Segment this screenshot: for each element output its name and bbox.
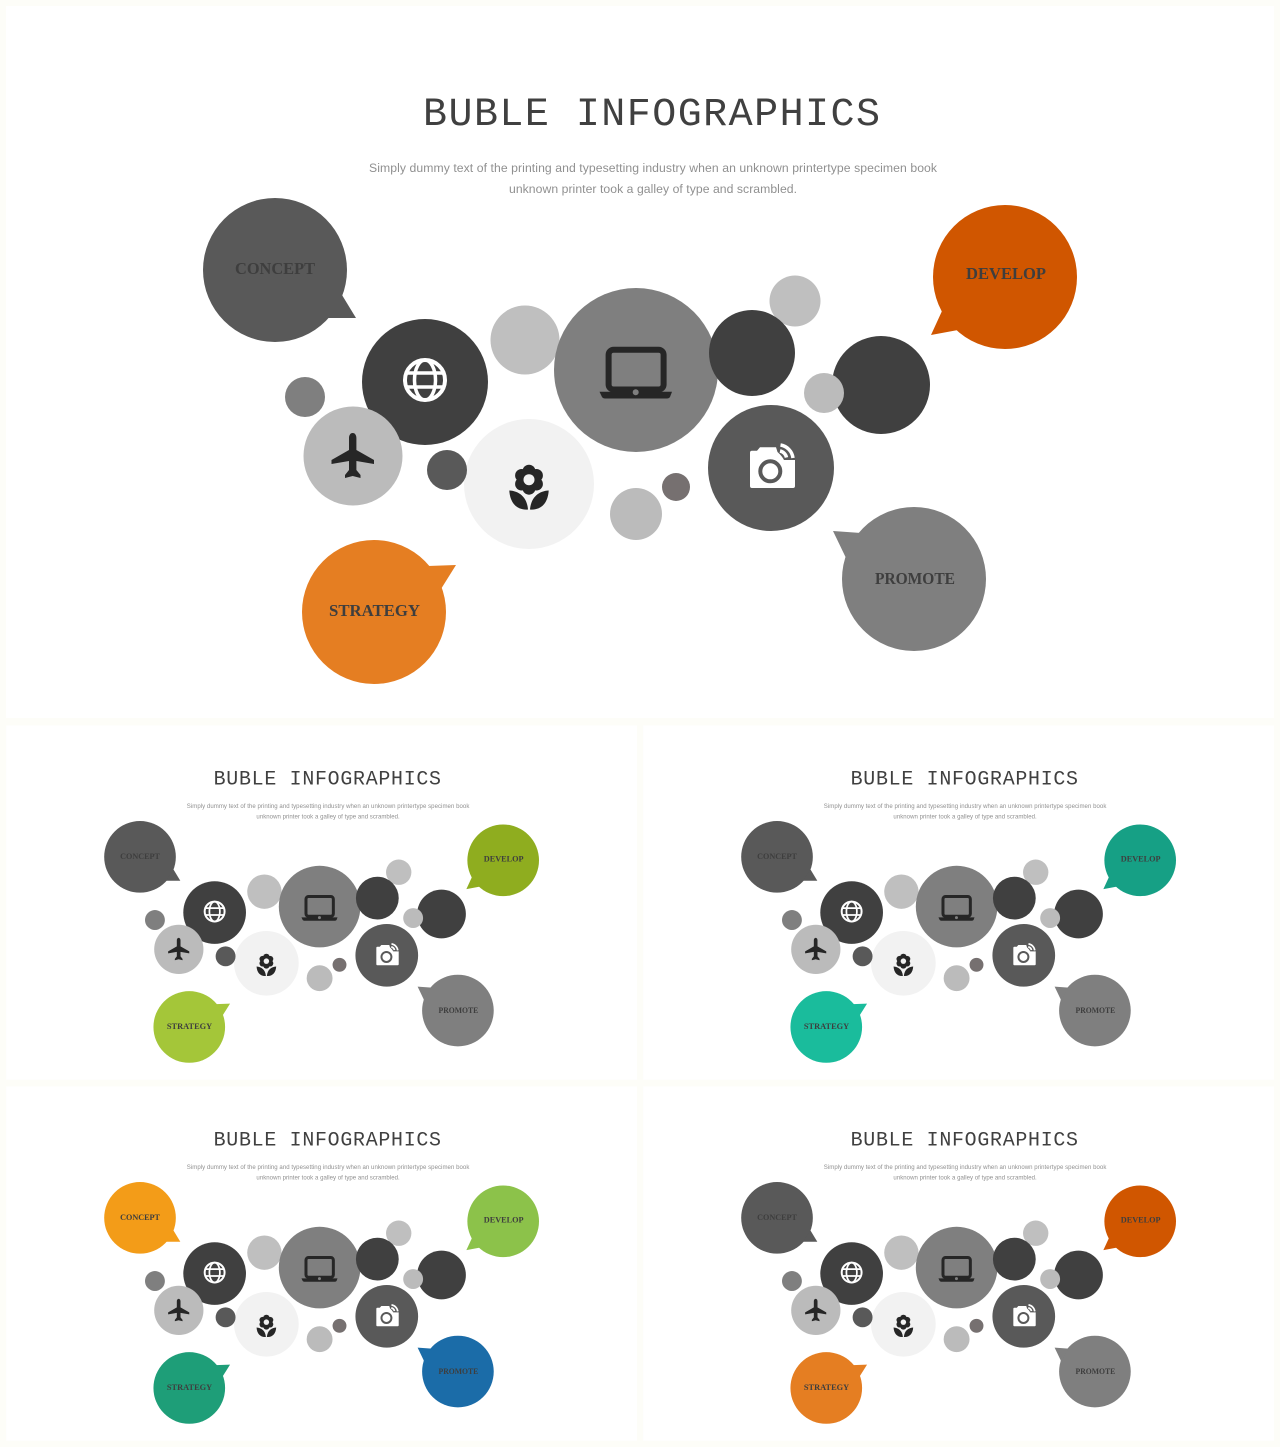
speech bubble: concept: [203, 198, 356, 342]
panel: multicolour variant: BUBLE INFOGRAPHICS: [214, 1129, 441, 1152]
panel: orange variant: CONCEPT: [757, 1213, 797, 1222]
panel: teal variant: unknown printer took a galley of type and scrambled.: [893, 815, 1037, 821]
subtitle text: unknown printer took a galley of type and scrambled.: [509, 182, 797, 196]
panel: orange variant: unknown printer took a galley of type and scrambled.: [893, 1176, 1037, 1182]
panel: teal variant: DEVELOP: [1121, 854, 1161, 863]
speech bubble: develop: [931, 205, 1077, 349]
panel: teal variant: STRATEGY: [804, 1022, 849, 1031]
speech bubble: develop: DEVELOP: [966, 264, 1046, 283]
panel: green variant: PROMOTE: [439, 1006, 479, 1015]
speech bubble: strategy: [302, 540, 456, 684]
panel: multicolour variant: unknown printer took a galley of type and scrambled.: [256, 1176, 400, 1182]
panel: orange variant: DEVELOP: [1121, 1215, 1161, 1224]
subtitle text: [369, 161, 938, 196]
speech bubble: strategy: STRATEGY: [329, 601, 420, 620]
panel: green variant: Simply dummy text of the printing and typesetting industry when an unknown printertype specimen book: [187, 804, 470, 810]
panel: teal variant: BUBLE INFOGRAPHICS: [851, 768, 1078, 791]
panel: green variant: CONCEPT: [120, 852, 160, 861]
panel: green variant: DEVELOP: [484, 854, 524, 863]
subtitle text: Simply dummy text of the printing and typesetting industry when an unknown printertype specimen book: [369, 161, 938, 175]
panel: orange variant: PROMOTE: [1076, 1367, 1116, 1376]
panel: orange variant: BUBLE INFOGRAPHICS: [851, 1129, 1078, 1152]
panel: multicolour variant: CONCEPT: [120, 1213, 160, 1222]
panel: multicolour variant: DEVELOP: [484, 1215, 524, 1224]
panel: main infographic: [6, 6, 1274, 718]
panel: green variant: unknown printer took a galley of type and scrambled.: [256, 815, 400, 821]
panel: green variant: [6, 725, 637, 1080]
panel: green variant: BUBLE INFOGRAPHICS: [214, 768, 441, 791]
bubble cluster with icons: globe, plane, laptop, flower, camera: [285, 276, 930, 549]
speech bubble: promote: [833, 507, 986, 651]
panel: orange variant: STRATEGY: [804, 1383, 849, 1392]
panel: multicolour variant: [6, 1086, 637, 1441]
panel: teal variant: Simply dummy text of the printing and typesetting industry when an unknown printertype specimen book: [824, 804, 1107, 810]
panel: green variant: STRATEGY: [167, 1022, 212, 1031]
speech bubble: concept: CONCEPT: [235, 259, 315, 278]
panel: orange variant: [643, 1086, 1274, 1441]
panel: teal variant: [643, 725, 1274, 1080]
title: BUBLE INFOGRAPHICS: [423, 93, 880, 138]
panel: multicolour variant: STRATEGY: [167, 1383, 212, 1392]
panel: multicolour variant: PROMOTE: [439, 1367, 479, 1376]
panel: multicolour variant: Simply dummy text of the printing and typesetting industry when an unknown printertype specimen book: [187, 1165, 470, 1171]
panel: orange variant: Simply dummy text of the printing and typesetting industry when an unknown printertype specimen book: [824, 1165, 1107, 1171]
panel: teal variant: CONCEPT: [757, 852, 797, 861]
panel: teal variant: PROMOTE: [1076, 1006, 1116, 1015]
speech bubble: promote: PROMOTE: [875, 569, 955, 588]
